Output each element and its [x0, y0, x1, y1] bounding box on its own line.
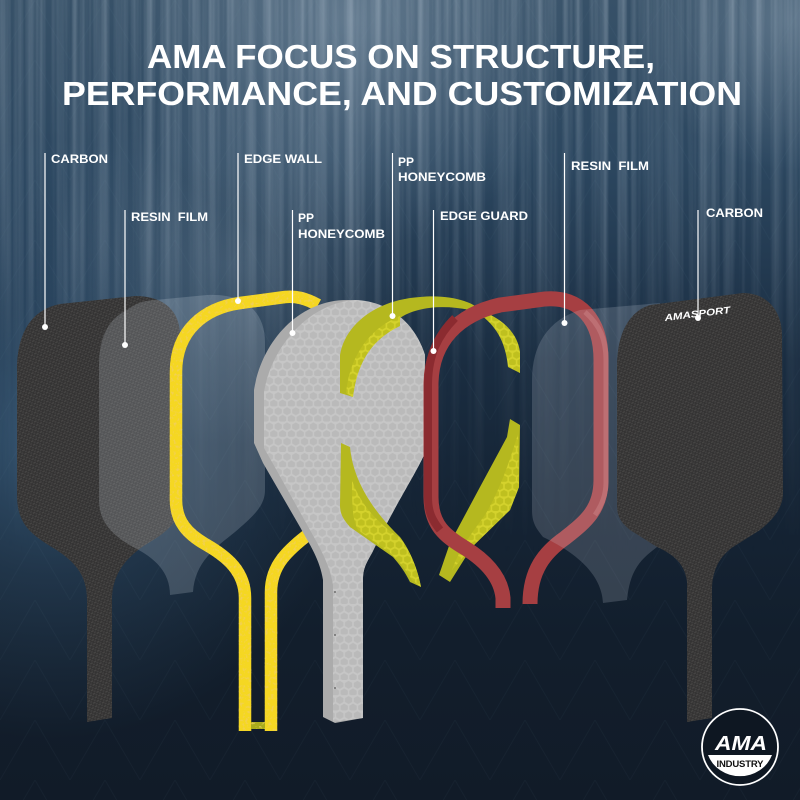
callout: pp honeycomb (ring)	[390, 153, 486, 319]
paddle layer: red edge guard	[428, 299, 606, 608]
callout: edge guard	[430, 209, 528, 354]
top-right piece	[482, 311, 520, 373]
callout: carbon (left)	[42, 152, 108, 330]
callout: pp honeycomb (core): HONEYCOMB	[298, 227, 385, 241]
title: PERFORMANCE, AND CUSTOMIZATION	[62, 75, 742, 112]
paddle layer: olive honeycomb ring pieces	[340, 296, 520, 587]
title: AMA FOCUS ON STRUCTURE,	[147, 38, 655, 75]
callout: edge wall: EDGE WALL	[244, 152, 322, 166]
callout: resin film (right)	[562, 153, 649, 326]
paddle layer: grey honeycomb core	[254, 300, 425, 723]
callout: resin film (right): RESIN FILM	[571, 159, 649, 173]
lower-left piece	[340, 443, 421, 587]
callout: pp honeycomb (ring): HONEYCOMB	[398, 170, 486, 184]
paddle layer: front carbon face	[617, 293, 783, 722]
top-left arc honeycomb	[346, 316, 400, 397]
brand mark on paddle: AMASPORT	[663, 305, 732, 324]
logo: AMA Industry badge: INDUSTRY	[716, 759, 764, 770]
callout: pp honeycomb (ring): PP	[398, 155, 414, 169]
paddle layer: front resin film	[532, 303, 660, 603]
logo: AMA Industry badge: AMA	[714, 733, 767, 755]
callout: pp honeycomb (core)	[290, 210, 385, 336]
title	[62, 38, 742, 112]
top-left arc piece	[340, 296, 482, 397]
lower-right honeycomb	[452, 434, 519, 570]
logo: AMA Industry badge	[702, 709, 778, 785]
paddle layer: rear resin film	[99, 295, 265, 595]
paddle layer: yellow edge wall	[176, 297, 318, 731]
callout: carbon (right)	[695, 206, 763, 321]
callout: carbon (right): CARBON	[706, 206, 763, 220]
callout: resin film (left)	[122, 210, 208, 348]
lower-left honeycomb	[352, 480, 421, 587]
paddle layer: rear carbon face	[17, 296, 180, 722]
lower-right piece	[439, 419, 520, 582]
callout: pp honeycomb (core): PP	[298, 211, 314, 225]
callout: edge guard: EDGE GUARD	[440, 209, 528, 223]
callout: resin film (left): RESIN FILM	[131, 210, 208, 224]
callout: carbon (left): CARBON	[51, 152, 108, 166]
callout: edge wall	[235, 152, 322, 304]
